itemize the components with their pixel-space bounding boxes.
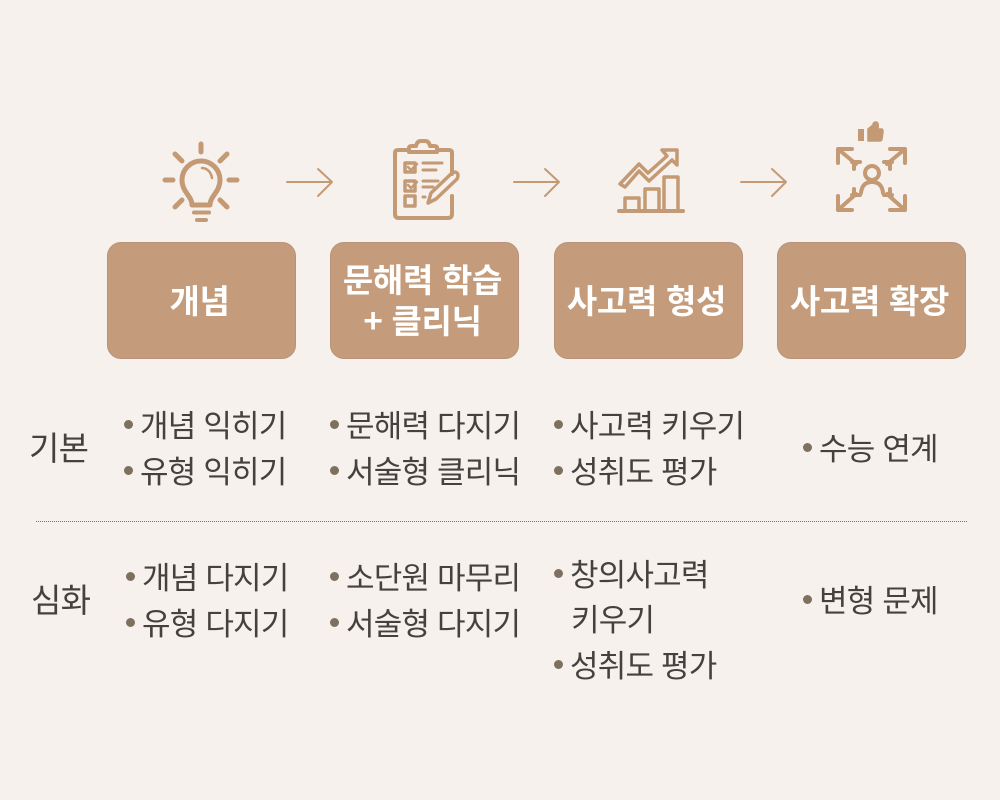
icon: light bulb: [165, 144, 237, 220]
step box: 문해력 학습 + 클리닉: [330, 242, 519, 359]
arrow 1: [287, 169, 332, 196]
arrow 2: [514, 169, 559, 196]
step box: 사고력 확장: 사고력 확장: [790, 274, 949, 322]
process icons and arrows: [162, 121, 908, 222]
divider: [36, 521, 967, 522]
step box: 문해력 학습 + 클리닉: + 클리닉: [363, 295, 482, 343]
list item continuation: 키우기: [571, 595, 654, 640]
list item: 성취도 평가: [570, 447, 716, 492]
step box: 사고력 형성: 사고력 형성: [567, 274, 726, 322]
step box: 문해력 학습 + 클리닉: 문해력 학습: [343, 254, 502, 302]
icon: person with arrows and thumbs up: [838, 122, 905, 210]
list item: 개념 다지기: [142, 553, 288, 598]
row label: 심화: 심화: [31, 574, 90, 622]
list item: 유형 다지기: [142, 599, 288, 644]
list item: 성취도 평가: [570, 641, 716, 686]
icon: growth chart: [619, 150, 683, 211]
list item: 유형 익히기: [140, 447, 286, 492]
step box: 사고력 확장: [777, 242, 966, 359]
list item: 사고력 키우기: [570, 401, 744, 446]
list item: 서술형 다지기: [346, 599, 520, 644]
list item: 수능 연계: [819, 424, 938, 469]
step box: 사고력 형성: [554, 242, 743, 359]
list item: 소단원 마무리: [346, 553, 520, 598]
icon: clipboard checklist: [395, 141, 458, 218]
list item: 변형 문제: [819, 576, 938, 621]
step box: 개념: 개념: [169, 274, 230, 322]
list item: 창의사고력: [570, 550, 709, 595]
row label: 기본: 기본: [29, 422, 88, 470]
step box: 개념: [107, 242, 296, 359]
list item: 문해력 다지기: [346, 401, 520, 446]
list item: 개념 익히기: [140, 401, 286, 446]
list item: 서술형 클리닉: [346, 447, 520, 492]
arrow 3: [741, 169, 786, 196]
